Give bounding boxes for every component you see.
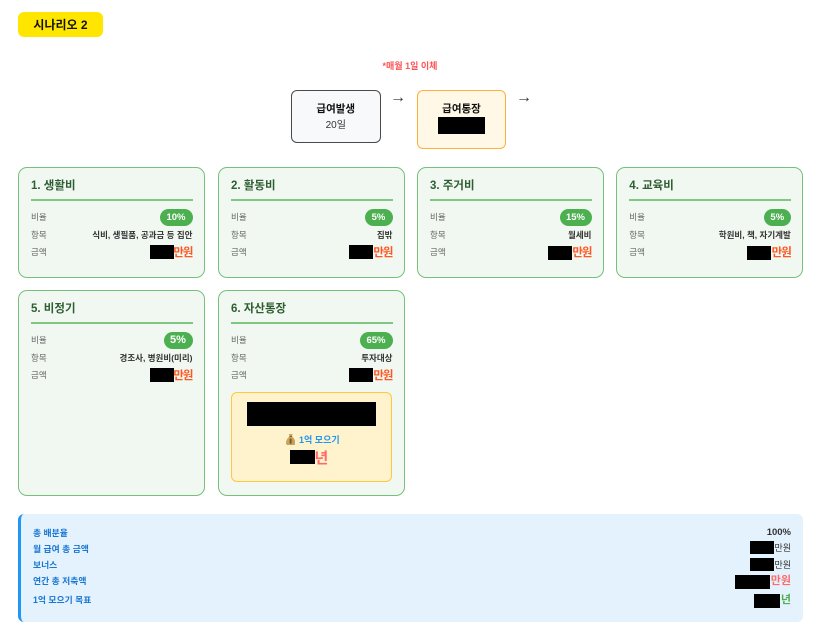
monthly salary unit: 만원: [774, 543, 791, 553]
redacted bonus: [750, 558, 774, 571]
summary label: total ratio: 총 배분율: [33, 528, 68, 538]
ratio pill: 15%: [566, 212, 585, 223]
heading: 4. 교육비: [629, 180, 674, 192]
items value: 경조사, 병원비(미리): [120, 353, 192, 363]
ratio pill: [360, 332, 392, 349]
ratio pill: 5%: [372, 212, 385, 223]
ratio label: 비율: [430, 212, 446, 222]
items label: 항목: [31, 230, 47, 240]
ratio pill: [364, 209, 392, 226]
redacted goal years: [754, 594, 780, 608]
redacted savings amount: [246, 402, 376, 426]
heading: 6. 자산통장: [231, 303, 286, 315]
ratio label: 비율: [231, 335, 247, 345]
arrow 2: →: [516, 89, 532, 106]
bonus unit: 만원: [774, 560, 791, 570]
heading: 5. 비정기: [31, 303, 76, 315]
scenario badge: [18, 12, 103, 37]
panel: summary: [18, 514, 803, 622]
savings goal callout: [230, 392, 392, 482]
summary label: goal: 1억 모으기 목표: [33, 594, 91, 604]
ratio pill: [560, 209, 592, 226]
amount unit: 만원: [173, 247, 192, 259]
salary event box: 20일: [326, 120, 346, 131]
ratio label: 비율: [629, 212, 645, 222]
ratio label: 비율: [31, 212, 47, 222]
panel: 교육비: [616, 167, 803, 278]
amount unit: 만원: [173, 370, 192, 382]
panel: 활동비: [218, 167, 404, 278]
amount label: 금액: [31, 370, 47, 380]
redacted annual savings: [735, 575, 770, 589]
amount label: 금액: [430, 247, 446, 257]
amount label: 금액: [31, 247, 47, 257]
panel: 주거비: [417, 167, 604, 278]
redacted amount: [150, 244, 174, 258]
amount label: 금액: [231, 370, 247, 380]
panel: 자산통장: [218, 290, 404, 496]
amount label: 금액: [231, 247, 247, 257]
summary label: monthly salary: 월 급여 총 금액: [33, 544, 89, 554]
amount label: 금액: [629, 247, 645, 257]
heading: 1. 생활비: [31, 180, 76, 192]
heading: 3. 주거비: [430, 180, 475, 192]
ratio pill: [160, 209, 192, 226]
panel: 생활비: [18, 167, 204, 278]
summary label: bonus: 보너스: [33, 560, 57, 570]
redacted monthly salary: [750, 541, 774, 554]
goal years unit: 년: [781, 594, 791, 606]
salary account box: [417, 90, 506, 149]
amount unit: 만원: [373, 370, 392, 382]
redacted amount: [348, 244, 373, 258]
ratio pill: [164, 332, 192, 349]
items label: 항목: [231, 353, 247, 363]
items value: 학원비, 책, 자기계발: [719, 230, 791, 240]
ratio pill: 5%: [770, 212, 784, 223]
years unit: 년: [314, 450, 328, 467]
salary event box: [291, 90, 380, 143]
goal label: 1억 모으기: [299, 435, 340, 445]
panel: 비정기: [18, 290, 204, 496]
amount unit: 만원: [772, 247, 791, 259]
redacted amount: [348, 368, 373, 382]
ratio pill: 10%: [166, 212, 186, 223]
redacted amount: [548, 246, 572, 260]
heading: 2. 활동비: [231, 180, 276, 192]
summary label: annual savings: 연간 총 저축액: [33, 576, 86, 586]
items value: 집밖: [377, 230, 392, 240]
redacted amount: [150, 368, 174, 382]
ratio label: 비율: [31, 335, 47, 345]
amount unit: 만원: [572, 247, 592, 259]
amount unit: 만원: [373, 247, 392, 259]
items label: 항목: [231, 230, 247, 240]
ratio pill: 65%: [366, 335, 386, 346]
transfer note: *매월 1일 이체: [383, 60, 437, 70]
items label: 항목: [31, 353, 47, 363]
salary account box: 급여통장: [442, 103, 481, 115]
annual savings unit: 만원: [771, 575, 791, 587]
salary event box: 급여발생: [316, 103, 355, 115]
icon: money bag: [286, 434, 295, 445]
items label: 항목: [430, 230, 446, 240]
redacted years: [290, 450, 314, 464]
ratio label: 비율: [231, 212, 247, 222]
ratio pill: 5%: [170, 334, 186, 346]
items value: 월세비: [568, 230, 592, 240]
items label: 항목: [629, 230, 645, 240]
redacted amount: [747, 246, 771, 260]
items value: 식비, 생필품, 공과금 등 집안: [92, 230, 192, 240]
scenario badge: 시나리오 2: [33, 18, 88, 32]
ratio pill: [764, 209, 791, 226]
total ratio value: 100%: [767, 526, 791, 538]
arrow 1: →: [390, 89, 406, 106]
items value: 투자대상: [361, 353, 392, 363]
